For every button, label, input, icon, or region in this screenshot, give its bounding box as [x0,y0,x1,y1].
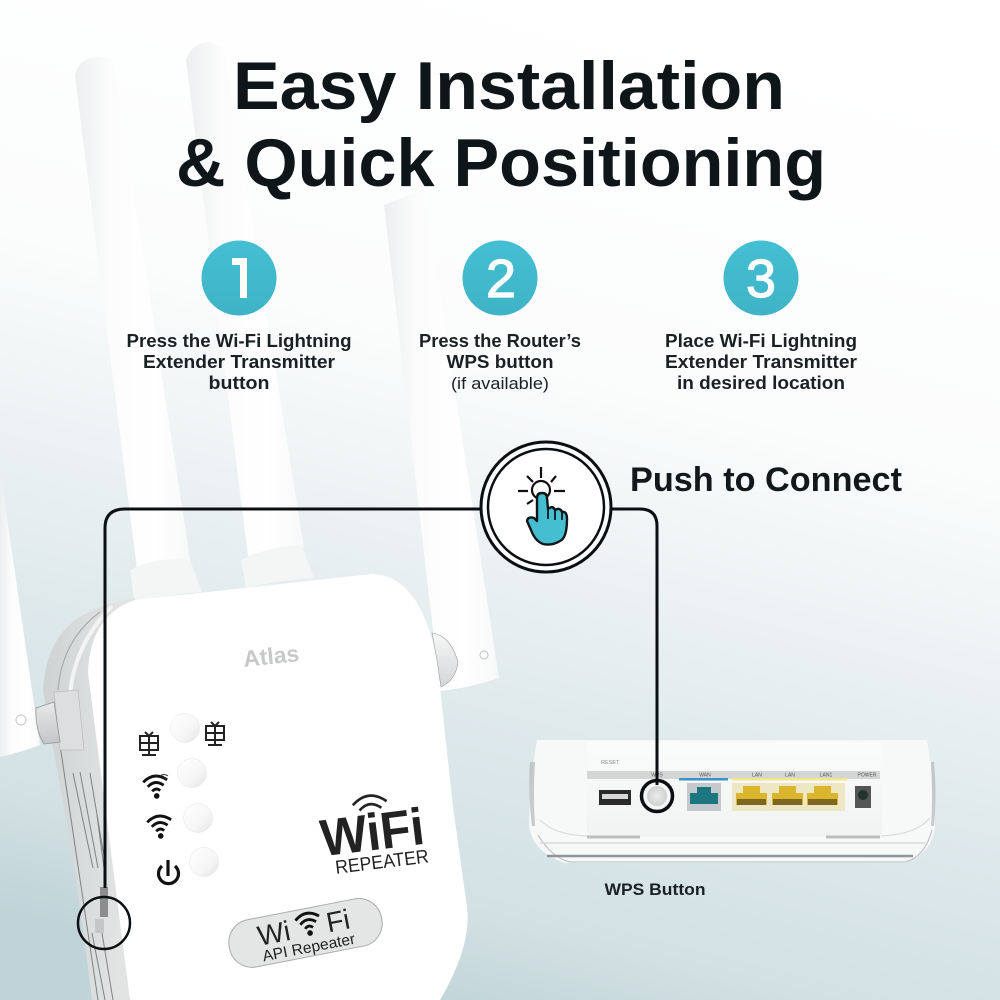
step 1: Press the Wi-Fi Lightning [126,331,352,351]
connector lines [105,509,657,888]
step 3 [665,240,857,393]
title: & Quick Positioning [176,125,826,201]
step 2 [419,240,581,393]
router label strip: LAN [785,772,795,778]
side hinge [36,690,84,750]
antenna hole: right [480,651,488,659]
device side shell [43,598,200,1000]
icon: wifi signal [143,774,173,840]
antenna: centre [186,42,314,588]
antenna: left [75,57,202,606]
wifi api repeater badge: Fi [324,904,352,938]
icon: power [158,860,178,884]
wifi api repeater badge: Wi [255,915,293,952]
push to connect label: Push to Connect [630,461,902,499]
title [176,48,826,201]
router body [529,740,935,863]
router label strip: LAN [752,772,762,778]
marker: wps button circle [642,780,672,812]
router label strip: RESET [601,760,620,766]
device front [88,574,468,1000]
title: Easy Installation [233,48,785,124]
step 2: Press the Router’s [419,331,581,351]
wps button [647,786,667,806]
router label strip: WAN [699,772,711,778]
wifi repeater logo: WiFi [317,798,428,868]
step 3: 3 [746,249,776,309]
usb port [599,790,631,805]
router label strip: LAN1 [820,772,832,778]
transmitter button [95,887,113,933]
step 3: in desired location [677,373,845,393]
wifi repeater logo: REPEATER [334,846,430,879]
icon: hand [527,493,567,545]
step 3: Place Wi-Fi Lightning [665,331,857,351]
wifi api repeater badge [225,895,386,971]
step 3: Extender Transmitter [665,352,857,372]
step 2: WPS button [446,352,554,372]
router label strip: WPS [651,772,663,778]
repeater device [36,574,488,1000]
indicator buttons [170,714,218,876]
power port [855,786,871,808]
router [529,740,936,863]
step 1: 1 [223,247,255,310]
wifi api repeater badge: API Repeater [261,931,357,965]
antenna hinge: right [432,633,458,687]
router label strip [587,760,880,780]
router label strip: POWER [858,772,877,778]
step 2: 2 [486,249,516,309]
step 2: (if available) [451,375,549,393]
step 1 [126,240,352,393]
antenna: far left [0,470,40,757]
wan port [687,783,721,811]
antenna: right [384,190,499,691]
marker: transmitter button circle [78,897,130,949]
step 1: Extender Transmitter [143,352,335,372]
step 1: button [208,373,270,393]
lan ports [732,783,845,811]
router label: WPS Button [604,880,706,899]
icon: tap rays [518,467,565,504]
icon: network indicators [139,722,225,755]
push to connect icon [481,442,611,572]
brand: Atlas [242,640,300,672]
